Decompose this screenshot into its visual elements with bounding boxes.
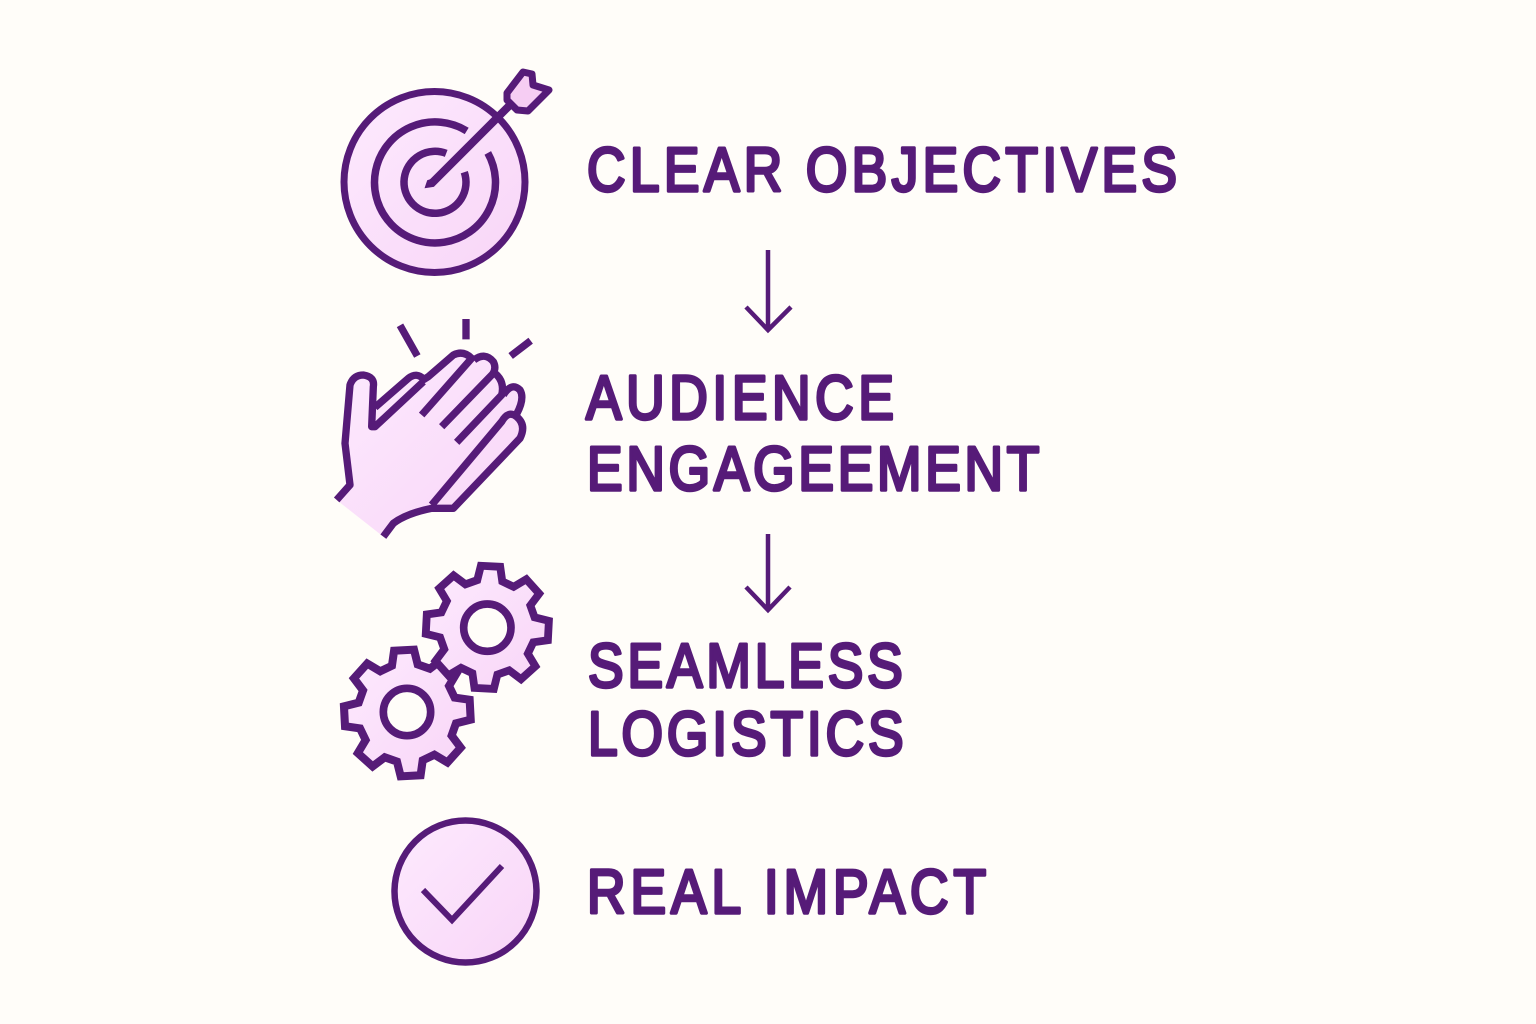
heading: real impact: REAL IMPACT bbox=[587, 858, 986, 927]
icon: target with arrow bbox=[344, 72, 549, 272]
arrow: objectives to engagement bbox=[746, 250, 791, 330]
icon: clapping hands bbox=[337, 319, 531, 537]
heading: clear objectives: CLEAR OBJECTIVES bbox=[587, 136, 1177, 205]
heading: audience: AUDIENCE bbox=[586, 364, 894, 433]
icon: check mark circle bbox=[394, 820, 536, 962]
heading: seamless: SEAMLESS bbox=[588, 632, 903, 701]
icon: gears bbox=[341, 563, 552, 779]
heading: logistics: LOGISTICS bbox=[588, 700, 904, 769]
heading: engagement: ENGAGEEMENT bbox=[587, 435, 1039, 504]
arrow: engagement to logistics bbox=[746, 534, 790, 610]
